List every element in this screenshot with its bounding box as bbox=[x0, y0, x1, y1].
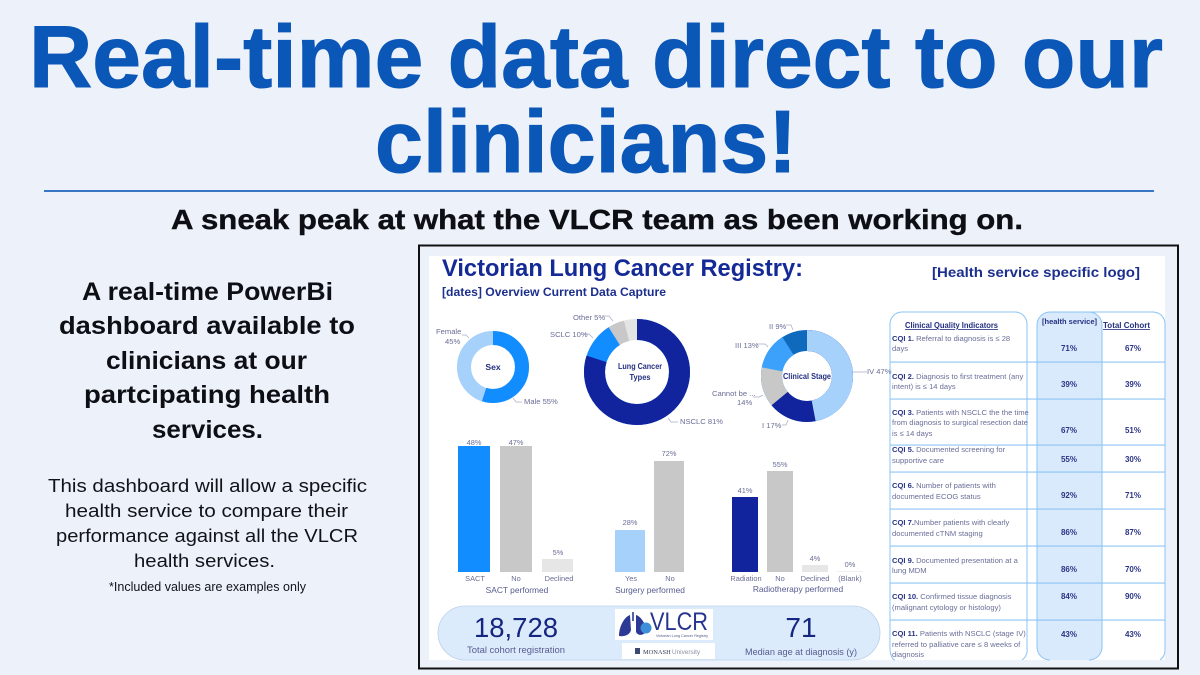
left description heading: services. bbox=[152, 416, 263, 444]
total cohort values: 39% bbox=[1125, 380, 1141, 389]
donut: sex bbox=[436, 327, 558, 406]
bar chart: radiotherapy performed: 41% bbox=[738, 486, 753, 495]
total cohort values: 67% bbox=[1125, 344, 1141, 353]
bar chart: radiotherapy performed: 55% bbox=[773, 460, 788, 469]
indicator text: CQI 5. Documented screening for bbox=[892, 445, 1006, 454]
left description paragraph: health service to compare their bbox=[65, 500, 348, 521]
health service values: 86% bbox=[1061, 565, 1077, 574]
indicator text: from diagnosis to surgical resection date bbox=[892, 418, 1028, 427]
bar chart: surgery performed: 72% bbox=[662, 449, 677, 458]
bar chart: radiotherapy performed: No bbox=[775, 574, 785, 583]
total cohort values: 30% bbox=[1125, 455, 1141, 464]
stat: total cohort registration: 18,728 bbox=[474, 612, 558, 643]
stat: total cohort registration bbox=[467, 612, 565, 655]
total cohort values bbox=[1125, 344, 1141, 639]
bar chart: surgery performed: 28% bbox=[623, 518, 638, 527]
donut: clinical stage: IV 47% bbox=[867, 367, 892, 376]
dashboard title bbox=[442, 255, 1140, 299]
indicator text: diagnosis bbox=[892, 650, 924, 659]
dashboard title: [dates] Overview Current Data Capture bbox=[442, 285, 666, 299]
bar chart: radiotherapy performed bbox=[730, 460, 863, 594]
bar chart: SACT performed: Declined bbox=[545, 574, 573, 583]
bar chart: radiotherapy performed: (Blank) bbox=[838, 574, 862, 583]
total cohort values: 43% bbox=[1125, 630, 1141, 639]
left description heading: A real-time PowerBi bbox=[82, 278, 333, 306]
indicator text: CQI 10. Confirmed tissue diagnosis bbox=[892, 592, 1012, 601]
indicator text: CQI 9. Documented presentation at a bbox=[892, 556, 1019, 565]
logo: VLCR: VLCR bbox=[650, 608, 708, 636]
left description paragraph bbox=[48, 475, 367, 571]
title: clinicians! bbox=[375, 92, 797, 191]
donut: clinical stage: II 9% bbox=[769, 322, 787, 331]
bar chart: surgery performed: Surgery performed bbox=[615, 585, 685, 595]
health service values: 84% bbox=[1061, 592, 1077, 601]
bar chart: SACT performed: SACT bbox=[465, 574, 485, 583]
bar chart: radiotherapy performed: 4% bbox=[810, 554, 821, 563]
bar chart: surgery performed bbox=[615, 449, 685, 595]
donut: lung cancer types: NSCLC 81% bbox=[680, 417, 723, 426]
stat: median age at diagnosis: Median age at diagnosis (y) bbox=[745, 646, 857, 657]
stat: total cohort registration: Total cohort registration bbox=[467, 644, 565, 655]
stat: median age at diagnosis: 71 bbox=[785, 612, 817, 643]
left description heading: clinicians at our bbox=[106, 347, 307, 375]
donut: clinical stage: Clinical Stage bbox=[783, 371, 831, 381]
bar chart: radiotherapy performed: 0% bbox=[845, 560, 856, 569]
donut: lung cancer types: Lung Cancer bbox=[618, 361, 663, 371]
bar chart: SACT performed: 47% bbox=[509, 438, 524, 447]
footnote: *Included values are examples only bbox=[109, 580, 307, 594]
bar chart: radiotherapy performed: Declined bbox=[801, 574, 829, 583]
bar chart: SACT performed: No bbox=[511, 574, 521, 583]
bar chart: radiotherapy performed: Radiotherapy performed bbox=[753, 584, 843, 594]
indicator text: CQI 11. Patients with NSCLC (stage IV) bbox=[892, 629, 1026, 638]
subtitle: A sneak peak at what the VLCR team as been working on. bbox=[171, 204, 1023, 235]
table header: Clinical Quality Indicators bbox=[905, 321, 999, 330]
bar chart: surgery performed: No bbox=[665, 574, 675, 583]
bar chart: SACT performed bbox=[458, 438, 573, 595]
table header: [health service] bbox=[1042, 317, 1098, 326]
donut: clinical stage: I 17% bbox=[762, 421, 782, 430]
health service values: 39% bbox=[1061, 380, 1077, 389]
indicator text: CQI 6. Number of patients with bbox=[892, 481, 996, 490]
summary pill bbox=[438, 606, 880, 660]
indicator text: supportive care bbox=[892, 456, 944, 465]
indicator text: documented ECOG status bbox=[892, 492, 981, 501]
logo: VLCR: Victorian Lung Cancer Registry bbox=[656, 634, 708, 638]
bar chart: SACT performed: 48% bbox=[467, 438, 482, 447]
left description paragraph: performance against all the VLCR bbox=[56, 525, 358, 546]
indicator text: CQI 7.Number patients with clearly bbox=[892, 518, 1010, 527]
table header: Total Cohort bbox=[1103, 321, 1150, 330]
total cohort values: 70% bbox=[1125, 565, 1141, 574]
indicator text: (malignant cytology or histology) bbox=[892, 603, 1001, 612]
table: clinical quality indicators bbox=[890, 312, 1165, 660]
indicator text bbox=[892, 334, 1029, 659]
donut: sex: 45% bbox=[445, 337, 460, 346]
title: Real-time data direct to our bbox=[29, 7, 1163, 106]
left description paragraph: This dashboard will allow a specific bbox=[48, 475, 367, 496]
indicator text: lung MDM bbox=[892, 566, 927, 575]
panel: dashboard screenshot bbox=[419, 246, 1178, 668]
indicator text: referred to palliative care ≤ 8 weeks of bbox=[892, 640, 1021, 649]
indicator text: documented cTNM staging bbox=[892, 529, 983, 538]
dashboard title: Victorian Lung Cancer Registry: bbox=[442, 255, 803, 282]
logo: Monash University bbox=[622, 643, 715, 659]
health service values: 67% bbox=[1061, 426, 1077, 435]
total cohort values: 90% bbox=[1125, 592, 1141, 601]
indicator text: CQI 2. Diagnosis to first treatment (any bbox=[892, 372, 1023, 381]
logo: Monash University: MONASH bbox=[643, 649, 671, 656]
stat: median age at diagnosis bbox=[745, 612, 857, 657]
donut: lung cancer types bbox=[550, 313, 723, 426]
indicator text: is ≤ 14 days bbox=[892, 429, 933, 438]
logo: Monash University: University bbox=[672, 649, 701, 656]
donut: lung cancer types: Types bbox=[630, 372, 651, 382]
logo: VLCR bbox=[615, 608, 713, 640]
indicator text: intent) is ≤ 14 days bbox=[892, 382, 956, 391]
health service values: 55% bbox=[1061, 455, 1077, 464]
total cohort values: 87% bbox=[1125, 528, 1141, 537]
left description heading bbox=[59, 278, 355, 444]
table header bbox=[905, 317, 1150, 330]
health service values: 71% bbox=[1061, 344, 1077, 353]
bar chart: surgery performed: Yes bbox=[625, 574, 637, 583]
health service values bbox=[1061, 344, 1077, 639]
total cohort values: 51% bbox=[1125, 426, 1141, 435]
donut: clinical stage: Cannot be ... bbox=[712, 389, 755, 398]
health service values: 86% bbox=[1061, 528, 1077, 537]
indicator text: CQI 3. Patients with NSCLC the the time bbox=[892, 408, 1029, 417]
donut: sex: Male 55% bbox=[524, 397, 558, 406]
donut: sex: Female bbox=[436, 327, 461, 336]
health service values: 92% bbox=[1061, 491, 1077, 500]
donut: clinical stage: III 13% bbox=[735, 341, 759, 350]
donut: lung cancer types: SCLC 10% bbox=[550, 330, 588, 339]
indicator text: days bbox=[892, 344, 908, 353]
total cohort values: 71% bbox=[1125, 491, 1141, 500]
left description heading: dashboard available to bbox=[59, 312, 355, 340]
title bbox=[29, 7, 1163, 191]
donut: sex: Sex bbox=[485, 362, 501, 372]
donut: clinical stage bbox=[712, 322, 892, 430]
bar chart: SACT performed: SACT performed bbox=[486, 585, 549, 595]
donut: clinical stage: 14% bbox=[737, 398, 752, 407]
health service values: 43% bbox=[1061, 630, 1077, 639]
donut: lung cancer types: Other 5% bbox=[573, 313, 605, 322]
indicator text: CQI 1. Referral to diagnosis is ≤ 28 bbox=[892, 334, 1010, 343]
left description paragraph: health services. bbox=[134, 550, 275, 571]
dashboard title: [Health service specific logo] bbox=[932, 264, 1140, 280]
bar chart: radiotherapy performed: Radiation bbox=[730, 574, 762, 583]
left description heading: partcipating health bbox=[84, 381, 330, 409]
bar chart: SACT performed: 5% bbox=[553, 548, 564, 557]
